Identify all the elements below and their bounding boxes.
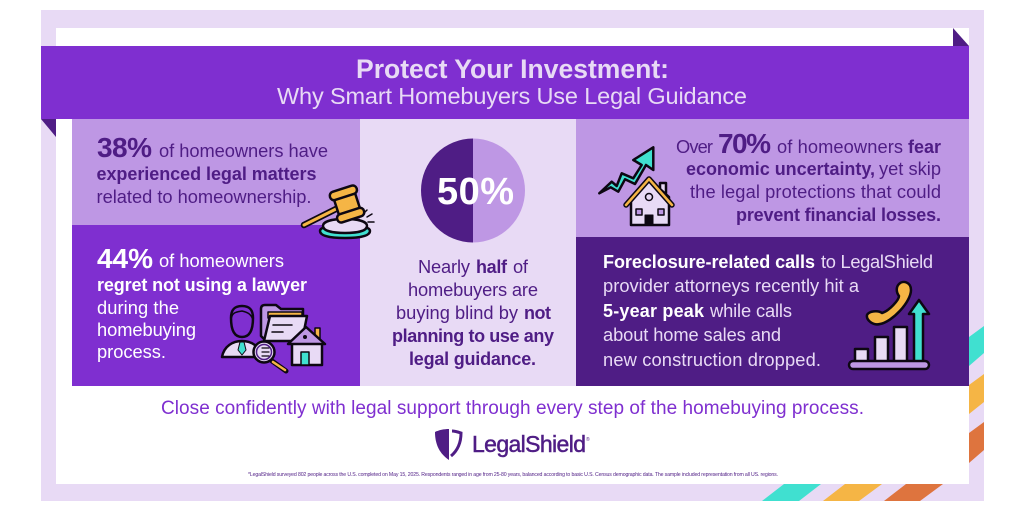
icon: rising arrow and house — [599, 147, 672, 225]
decorative stripes — [762, 326, 984, 501]
panel: 70% stat: of homeowners — [777, 136, 903, 157]
icon: phone and bar chart — [849, 282, 929, 369]
ribbon fold right — [953, 28, 969, 46]
logo: LegalShield: LegalShield — [472, 431, 586, 457]
half filled circle — [421, 138, 525, 242]
panel: 70% stat: the legal protections that could — [690, 181, 941, 202]
closing line: Close confidently with legal support through every step of the homebuying process. — [161, 398, 864, 419]
panel: 44% stat: of homeowners — [159, 250, 284, 271]
panel: 38% stat — [72, 119, 360, 225]
panel: foreclosure calls — [576, 237, 969, 386]
panel: 70% stat — [576, 119, 969, 237]
panel: 50% stat: buying blind by — [396, 302, 519, 323]
panel: 70% stat: fear — [908, 137, 941, 157]
panel: 44% stat: during the — [97, 297, 179, 318]
panel: 38% stat: 38% — [97, 132, 152, 163]
panel: 70% stat: economic uncertainty, — [686, 159, 875, 179]
icon: lawyer, folder, house and magnifier — [222, 305, 325, 371]
panel: 38% stat: experienced legal matters — [96, 164, 316, 184]
panel: 44% stat: homebuying — [97, 319, 196, 340]
ribbon fold left — [41, 119, 56, 137]
panel: foreclosure calls: provider attorneys recently hit a — [603, 275, 860, 296]
panel: 70% stat: prevent financial losses. — [736, 205, 941, 225]
panel: 50% stat: of — [513, 256, 529, 277]
panel: foreclosure calls: to LegalShield — [821, 251, 933, 272]
logo shield — [435, 429, 461, 460]
panel: 70% stat: yet skip — [879, 158, 941, 179]
panel: 44% stat: regret not using a lawyer — [97, 275, 307, 295]
panel: 50% stat: planning to use any — [392, 326, 554, 346]
header banner — [41, 46, 969, 119]
panel: 50% stat: half — [476, 257, 508, 277]
panel: 44% stat: process. — [97, 341, 166, 362]
panel: foreclosure calls: new construction dropped. — [603, 349, 821, 370]
panel: 38% stat: of homeowners have — [159, 140, 328, 161]
panel: 50% stat: not — [524, 303, 551, 323]
panel: 50% stat: Nearly — [418, 256, 471, 277]
panel: 70% stat: 70% — [718, 128, 771, 159]
footnote: *LegalShield surveyed 802 people across the U.S. completed on May 15, 2025. Respondents ranged in age from 25-80 years, balanced according to basic U.S. Census demographic data. The sample included representation from all US. regions. — [248, 472, 778, 478]
panel: 38% stat: related to homeownership. — [96, 186, 312, 207]
logo: LegalShield: ® — [586, 436, 590, 443]
panel: foreclosure calls: while calls — [709, 300, 792, 321]
title: Protect Your Investment: — [356, 54, 669, 84]
logo: LegalShield — [435, 429, 590, 460]
panel: foreclosure calls: Foreclosure-related calls — [603, 252, 815, 272]
panel: 50% stat: homebuyers are — [408, 279, 538, 300]
panel: foreclosure calls: about home sales and — [603, 324, 781, 345]
panel: 44% stat: 44% — [97, 243, 153, 274]
panel: 70% stat: Over — [676, 136, 713, 157]
panel: 44% stat — [72, 225, 360, 386]
half filled circle: 50% — [437, 171, 514, 213]
subtitle: Why Smart Homebuyers Use Legal Guidance — [277, 83, 747, 109]
panel: 50% stat — [360, 119, 576, 386]
panel: foreclosure calls: 5-year peak — [603, 301, 705, 321]
icon: gavel — [304, 184, 374, 238]
panel: 50% stat: legal guidance. — [409, 349, 536, 369]
